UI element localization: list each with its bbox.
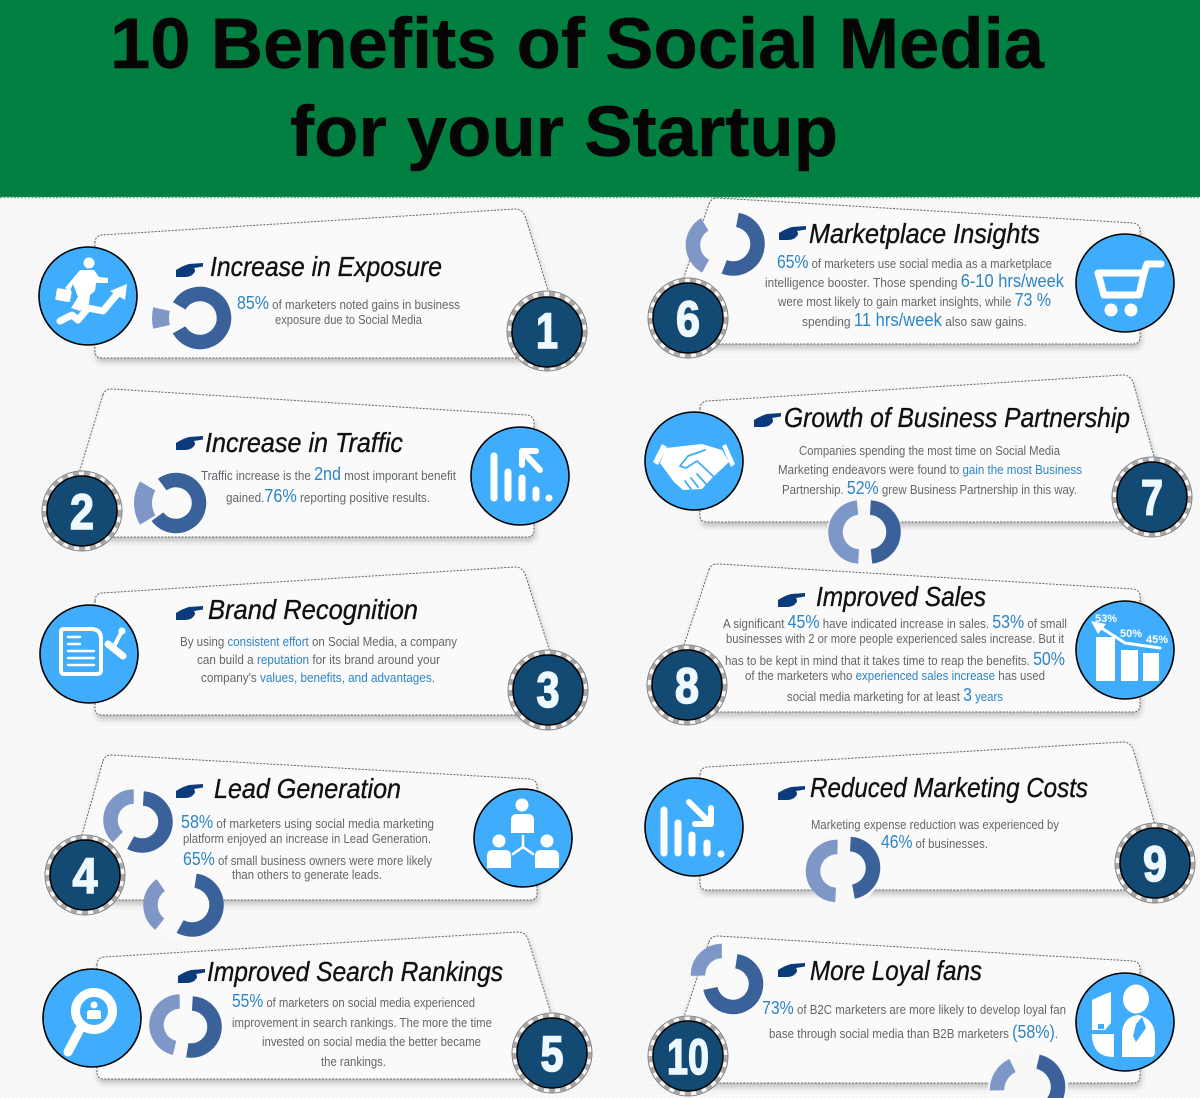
- card shape: [97, 932, 553, 1079]
- donut chart: 58%: [101, 787, 167, 853]
- text block: has to be kept in mind that it takes time to reap the benefits. 50%: [725, 649, 1065, 669]
- text block: than others to generate leads.: [232, 867, 382, 882]
- icon: pointing hand: [176, 606, 203, 620]
- text block: [811, 817, 1059, 852]
- panel: 1 Increase in Exposure: [39, 209, 587, 371]
- text block: 73% of B2C marketers are more likely to develop loyal fan: [762, 998, 1066, 1018]
- text block: 46% of businesses.: [881, 832, 988, 852]
- icon: falling bar chart: 45%: [1146, 634, 1168, 646]
- number badge 2: 2: [70, 484, 94, 540]
- number badge 10: 10: [667, 1029, 709, 1085]
- icon: magnifier: [43, 969, 141, 1067]
- text block: Companies spending the most time on Social Media: [799, 443, 1061, 458]
- text block: gained.76% reporting positive results.: [226, 486, 430, 506]
- number badge 9: [1115, 823, 1195, 903]
- icon: pointing hand: [178, 969, 205, 983]
- donut chart: 58%: [988, 1048, 1068, 1098]
- title: for your Startup: [290, 93, 838, 172]
- text block: [201, 464, 456, 506]
- card shape: [684, 936, 1140, 1083]
- title: 10 Benefits of Social Media: [110, 5, 1045, 84]
- donut chart: 76%: [131, 458, 221, 548]
- text block: [765, 252, 1065, 330]
- icon: bars with down arrow: [645, 778, 743, 876]
- text block: 55% of marketers on social media experienced: [232, 991, 475, 1011]
- text block: spending 11 hrs/week also saw gains.: [802, 310, 1027, 330]
- heading: Growth of Business Partnership: [784, 402, 1130, 433]
- icon: pointing hand: [778, 593, 805, 607]
- icon: pointing hand: [176, 784, 203, 798]
- card shape: [684, 564, 1140, 712]
- number badge 5: [512, 1013, 592, 1093]
- card shape: [82, 755, 537, 900]
- donut chart: 52%: [827, 495, 901, 569]
- text block: platform enjoyed an increase in Lead Generation.: [183, 831, 431, 846]
- donut chart: 65%: [684, 212, 762, 278]
- heading: Improved Sales: [816, 581, 986, 612]
- heading: Brand Recognition: [208, 594, 418, 625]
- text block: improvement in search rankings. The more the time: [232, 1015, 492, 1030]
- card shape: [684, 198, 1140, 344]
- panel: 10 More Loyal fans: [648, 936, 1174, 1098]
- header band: [0, 0, 1200, 197]
- donut chart: 73%: [698, 951, 760, 1011]
- card shape: [700, 742, 1155, 890]
- icon: falling bar chart: 53%: [1095, 613, 1117, 625]
- text block: [232, 991, 492, 1069]
- text block: social media marketing for at least 3 years: [787, 685, 1003, 705]
- donut chart: 55%: [151, 996, 216, 1054]
- text block: [723, 612, 1067, 705]
- number badge 6: 6: [676, 291, 700, 347]
- text block: intelligence booster. Those spending 6-10 hrs/week: [765, 271, 1065, 291]
- icon: pointing hand: [778, 963, 805, 977]
- heading: Lead Generation: [214, 773, 401, 804]
- heading: Improved Search Rankings: [207, 956, 503, 987]
- card shape: [95, 567, 551, 715]
- number badge 4: [45, 835, 125, 915]
- icon: falling bar chart: [1076, 601, 1174, 699]
- icon: pointing hand: [778, 786, 805, 800]
- donut chart: 85%: [153, 271, 247, 365]
- heading: Marketplace Insights: [809, 218, 1040, 249]
- donut chart: 46%: [806, 833, 880, 907]
- icon: shopping cart: [1076, 234, 1174, 332]
- number badge 1: [507, 291, 587, 371]
- icon: pointing hand: [176, 436, 203, 450]
- donut chart: 65%: [140, 869, 220, 941]
- panel: 4 Lead Generation: [45, 755, 572, 941]
- heading: Increase in Traffic: [205, 427, 403, 458]
- number badge 10: [648, 1016, 728, 1096]
- title: [110, 5, 1045, 172]
- text block: of the marketers who experienced sales increase has used: [745, 668, 1045, 683]
- panel: 8 Improved Sales: [647, 564, 1174, 725]
- text block: the rankings.: [321, 1054, 386, 1069]
- icon: pointing hand: [176, 263, 203, 277]
- text block: exposure due to Social Media: [275, 312, 423, 327]
- text block: [181, 812, 434, 882]
- number badge 1: 1: [536, 303, 558, 359]
- icon: team of three: [474, 789, 572, 887]
- text block: 65% of small business owners were more likely: [183, 849, 432, 869]
- text block: 85% of marketers noted gains in business: [237, 293, 460, 313]
- number badge 7: 7: [1141, 470, 1163, 526]
- number badge 5: 5: [540, 1026, 564, 1082]
- text block: invested on social media the better became: [262, 1034, 481, 1049]
- number badge 8: [647, 645, 727, 725]
- icon: falling bar chart: 50%: [1120, 628, 1142, 640]
- icon: climbing businessman: [39, 247, 137, 345]
- text block: Marketing expense reduction was experienced by: [811, 817, 1059, 832]
- text block: [237, 293, 460, 327]
- panel: 5 Improved Search Rankings: [43, 932, 592, 1093]
- card shape: [95, 209, 551, 358]
- panel: 9 Reduced Marketing Costs: [645, 742, 1195, 907]
- number badge 9: 9: [1143, 836, 1167, 892]
- panel: 7 Growth of Business Partnership: [645, 375, 1192, 569]
- text block: were most likely to gain market insights, while 73 %: [777, 290, 1051, 310]
- text block: company's values, benefits, and advantages.: [201, 670, 435, 685]
- text block: A significant 45% have indicated increase in sales. 53% of small: [723, 612, 1067, 632]
- number badge 2: [42, 471, 122, 551]
- number badge 3: 3: [536, 662, 560, 718]
- text block: businesses with 2 or more people experienced sales increase. But it: [726, 631, 1064, 646]
- icon: handshake: [645, 412, 743, 510]
- number badge 3: [508, 650, 588, 730]
- text block: [778, 443, 1082, 498]
- text block: [180, 634, 457, 685]
- card shape: [700, 375, 1155, 522]
- text block: Marketing endeavors were found to gain the most Business: [778, 462, 1082, 477]
- text block: 58% of marketers using social media marketing: [181, 812, 434, 832]
- number badge 6: [648, 278, 728, 358]
- icon: pointing hand: [754, 413, 781, 427]
- heading: Reduced Marketing Costs: [810, 772, 1088, 803]
- icon: pointing hand: [779, 226, 806, 240]
- icon: document and stamp: [40, 605, 138, 703]
- card shape: [80, 389, 534, 537]
- heading: More Loyal fans: [810, 955, 982, 986]
- text block: can build a reputation for its brand around your: [197, 652, 441, 667]
- panel: 3 Brand Recognition: [40, 567, 588, 730]
- icon: bars with up arrow: [471, 427, 569, 525]
- text block: Partnership. 52% grew Business Partnership in this way.: [782, 478, 1077, 498]
- text block: [762, 998, 1066, 1042]
- panel: 2 Increase in Traffic: [42, 389, 569, 551]
- number badge 7: [1112, 457, 1192, 537]
- text block: Traffic increase is the 2nd most imporant benefit: [201, 464, 456, 484]
- panel: 6 Marketplace Insights: [648, 198, 1174, 358]
- icon: person with tie: [1076, 973, 1174, 1071]
- number badge 4: 4: [72, 848, 98, 904]
- heading: Increase in Exposure: [210, 251, 442, 282]
- text block: By using consistent effort on Social Media, a company: [180, 634, 457, 649]
- text block: 65% of marketers use social media as a marketplace: [777, 252, 1052, 272]
- number badge 8: 8: [675, 658, 699, 714]
- text block: base through social media than B2B marketers (58%).: [769, 1022, 1058, 1042]
